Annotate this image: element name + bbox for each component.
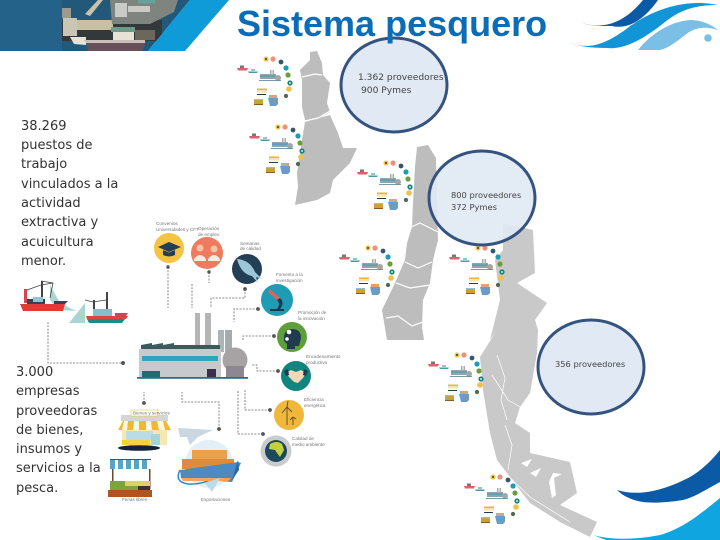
icon: fish, quality: de calidad — [240, 246, 261, 251]
icon: people, employment: de empleo — [198, 232, 220, 237]
text block: puestos de trabajo: actividad — [21, 196, 81, 211]
icon: gears head, innovation: Promoción de — [298, 310, 327, 315]
mini cluster: center 2 — [339, 245, 395, 295]
icon: graduation cap, universities: Universidades y CFT — [156, 227, 199, 232]
connector: boats to factory — [48, 322, 125, 365]
icon: people, employment — [191, 226, 223, 269]
connectors from factory — [142, 265, 280, 436]
mini cluster: north 2 — [249, 124, 305, 174]
text block: empresas proveedoras — [16, 365, 101, 496]
icon: gears head, innovation: la innovación — [298, 316, 325, 321]
icon: earth, environment: medio ambiente — [292, 442, 325, 447]
icon: export ship and plane: Exportaciones — [201, 497, 231, 502]
text block: puestos de trabajo: vinculados a la — [21, 177, 118, 192]
bottom-right wave — [593, 450, 720, 540]
callout: 356 proveedores — [538, 320, 644, 414]
text block: puestos de trabajo — [21, 119, 118, 269]
callout: 800 proveedores: 372 Pymes — [451, 202, 497, 212]
icon: wind turbines, energy: Eficiencia — [304, 397, 324, 402]
text block: empresas proveedoras: 3.000 — [16, 365, 53, 380]
icon: export ship and plane — [178, 428, 241, 502]
text block: puestos de trabajo: acuicultura — [21, 235, 94, 250]
mini cluster: north 1 — [237, 56, 293, 106]
icon: earth, environment: Calidad de — [292, 436, 314, 441]
icon: wind turbines, energy — [274, 397, 326, 430]
icon: microscope, research: Fomento a la — [276, 272, 303, 277]
text block: empresas proveedoras: servicios a la — [16, 461, 101, 476]
callout: 356 proveedores: 356 proveedores — [555, 359, 625, 369]
icon: red fishing boat — [20, 281, 76, 311]
text block: puestos de trabajo: trabajo — [21, 157, 67, 172]
text block: empresas proveedoras: de bienes, — [16, 423, 83, 438]
icon: market stall: Ferias libres — [122, 497, 148, 502]
icon: handshake, productive chain — [281, 354, 341, 391]
callout: 1.362 proveedores: 900 Pymes — [361, 86, 412, 96]
mini cluster: center 1 — [357, 160, 413, 210]
text block: puestos de trabajo: extractiva y — [21, 215, 99, 230]
icon: wind turbines, energy: energética — [304, 403, 326, 408]
icon: fish, quality: Semanas — [240, 241, 260, 246]
text block: empresas proveedoras: pesca. — [16, 481, 58, 496]
callout: 1.362 proveedores: 1.362 proveedores — [358, 73, 444, 83]
map of Chile — [295, 51, 597, 537]
icon: gears head, innovation — [277, 310, 327, 352]
icon: graduation cap, universities — [154, 221, 199, 263]
icon: microscope, research — [261, 272, 303, 316]
header photo: fishing boats — [0, 0, 190, 51]
icon: handshake, productive chain: productivo — [306, 360, 328, 365]
callout: 800 proveedores — [429, 151, 535, 245]
icon: earth, environment — [260, 436, 325, 466]
icon: fish, quality — [232, 241, 262, 284]
icon: people, employment: Operación — [198, 226, 220, 231]
callout: 1.362 proveedores — [341, 38, 447, 132]
icon: shop — [118, 410, 171, 451]
mini cluster: south 2 — [464, 474, 520, 524]
text block: puestos de trabajo: puestos de — [21, 138, 92, 153]
icon: shop: Bienes y servicios — [133, 410, 170, 416]
text block: empresas proveedoras: empresas — [16, 384, 80, 399]
mini cluster: center 3 — [449, 245, 505, 295]
icon: microscope, research: investigación — [276, 278, 303, 283]
icon: factory — [137, 313, 248, 379]
text block: puestos de trabajo: 38.269 — [21, 119, 66, 134]
icon: market stall — [108, 459, 152, 502]
callout: 800 proveedores: 800 proveedores — [451, 190, 521, 200]
text block: puestos de trabajo: menor. — [21, 254, 66, 269]
top-right wave logo — [570, 0, 718, 50]
title: Sistema pesquero — [237, 3, 547, 44]
text block: empresas proveedoras: proveedoras — [16, 404, 97, 419]
icon: graduation cap, universities: Convenios — [156, 221, 178, 226]
text block: empresas proveedoras: insumos y — [16, 442, 82, 457]
mini cluster: south 1 — [428, 352, 484, 402]
header blue slanted band — [148, 0, 229, 51]
icon: teal fishing boat — [69, 292, 128, 323]
icon: handshake, productive chain: Encadenamiento — [306, 354, 341, 359]
